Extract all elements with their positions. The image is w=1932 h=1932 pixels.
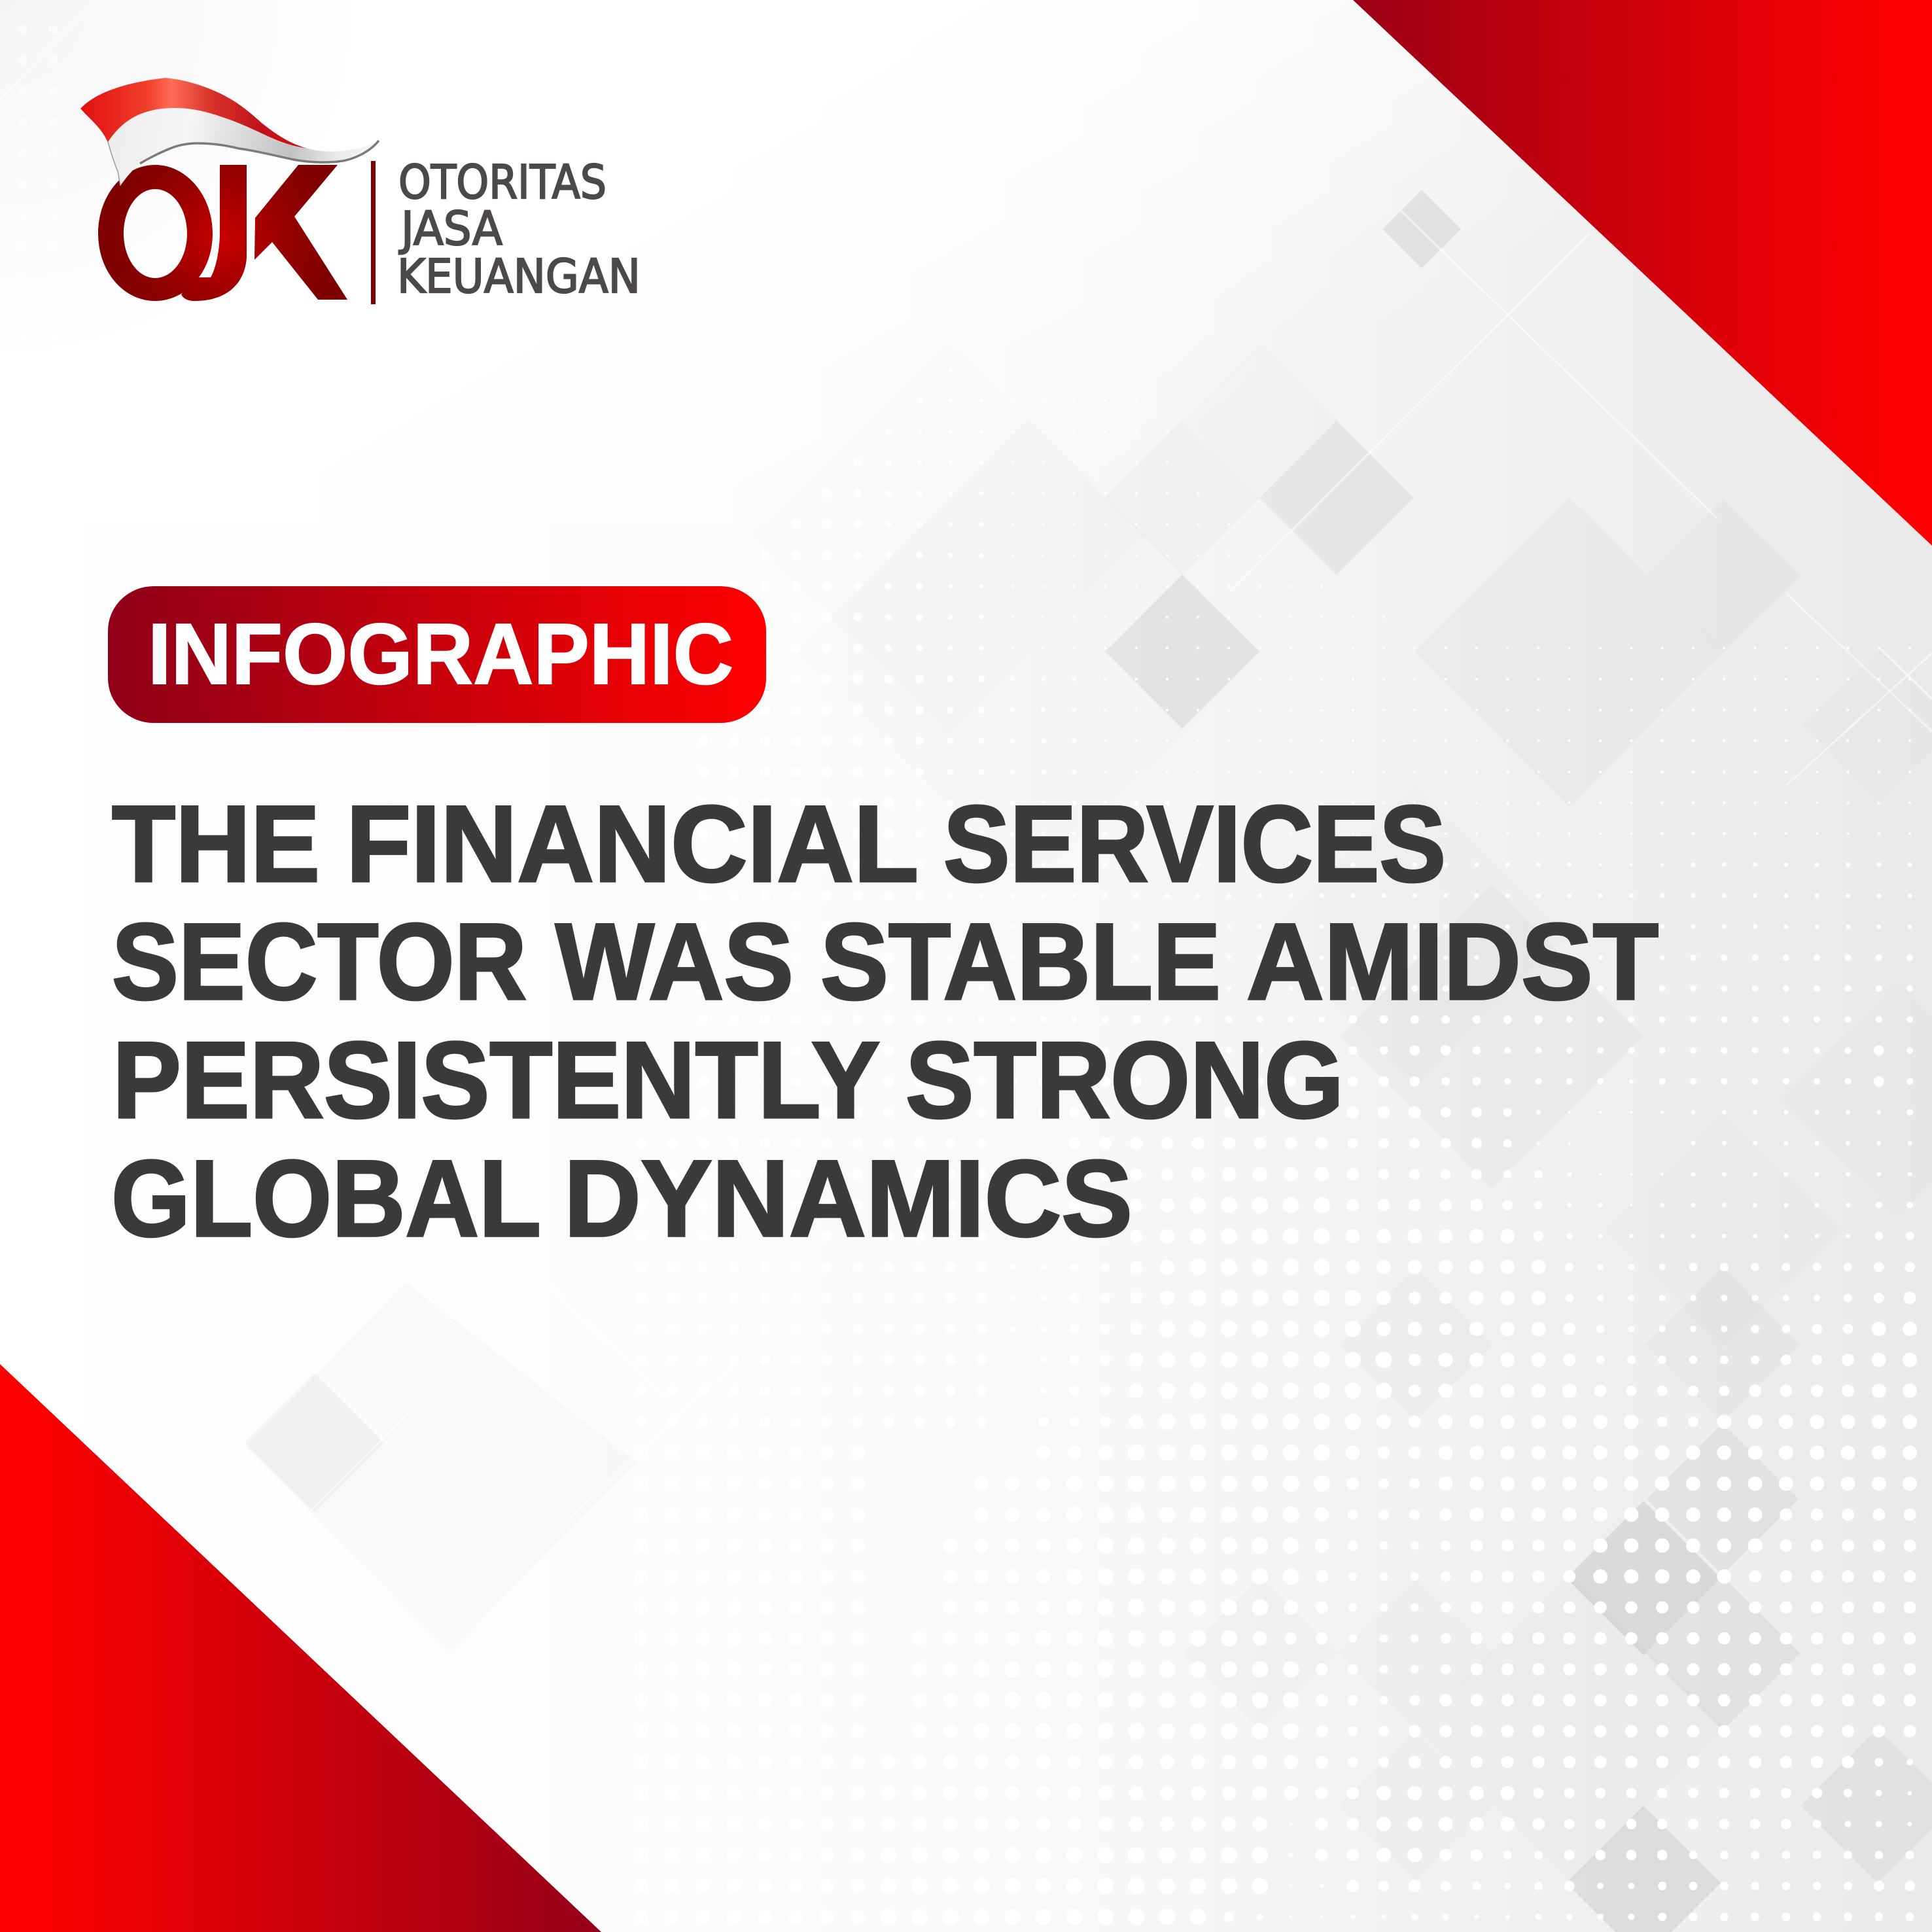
- title: PERSISTENTLY: [113, 1020, 880, 1141]
- logo letter O: [98, 165, 213, 301]
- title: STABLE: [820, 902, 1221, 1023]
- logo divider: [371, 161, 376, 304]
- logo wordmark: OTORITAS: [398, 155, 606, 209]
- logo wordmark: [397, 155, 641, 304]
- logo letters J and K: [181, 165, 347, 301]
- title: WAS: [555, 902, 794, 1023]
- title: AMIDST: [1246, 902, 1659, 1023]
- OJK logo: [80, 78, 641, 304]
- title: STRONG: [905, 1020, 1344, 1141]
- title: GLOBAL: [111, 1138, 541, 1259]
- logo wordmark: KEUANGAN: [397, 249, 641, 304]
- infographic badge: [108, 586, 766, 723]
- title: DYNAMICS: [564, 1138, 1133, 1259]
- logo flag red band: [80, 78, 307, 149]
- bottom left red triangle: [0, 1364, 601, 1932]
- title: SERVICES: [943, 784, 1446, 905]
- logo flag shadow edge: [140, 141, 379, 164]
- title: [111, 784, 1659, 1259]
- infographic badge: INFOGRAPHIC: [148, 606, 733, 702]
- logo wordmark: JASA: [398, 202, 502, 256]
- logo flag white band: [108, 108, 379, 186]
- title: THE: [112, 784, 320, 905]
- title: FINANCIAL: [346, 784, 919, 905]
- background diamonds: [245, 190, 1932, 1932]
- top right red triangle: [1353, 0, 1932, 546]
- logo flag fold line: [108, 142, 120, 186]
- title: SECTOR: [112, 902, 527, 1023]
